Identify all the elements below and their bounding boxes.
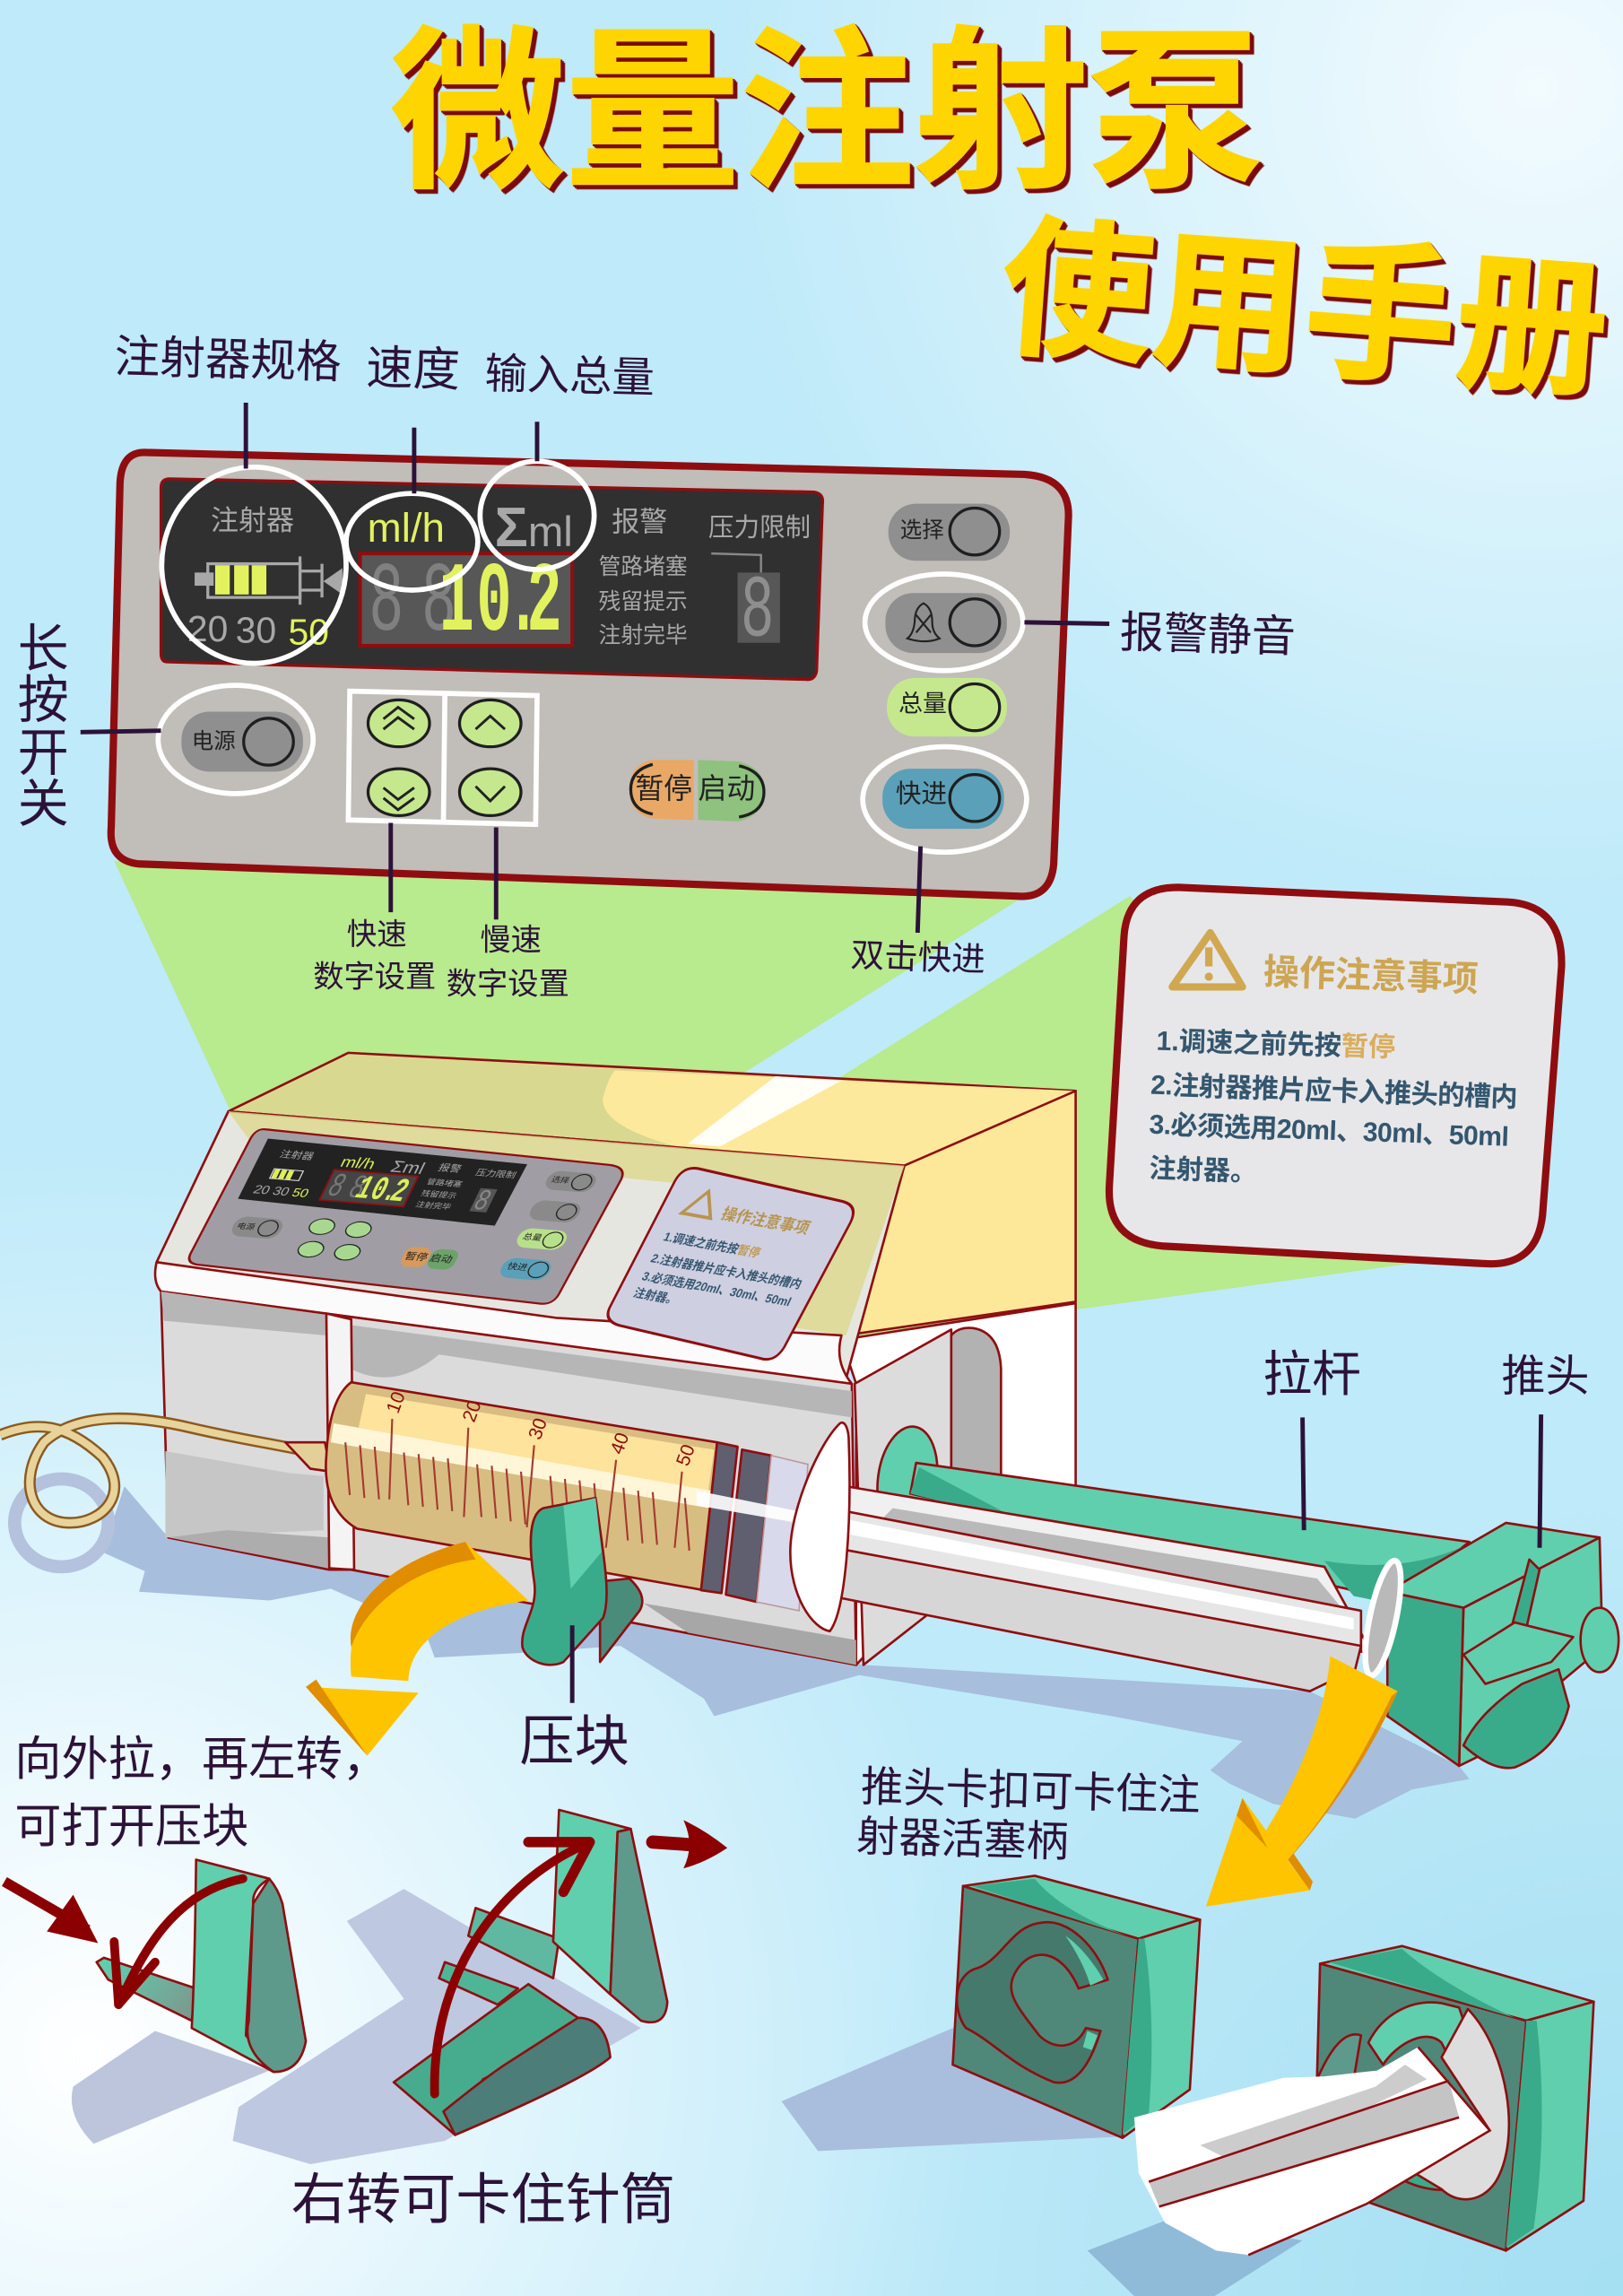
green projection beam to panel xyxy=(114,861,1024,1113)
arrow right rim xyxy=(1237,1692,1398,1891)
push arrow xyxy=(4,1882,88,1930)
clear section glare xyxy=(697,1491,797,1523)
size 30: 30 xyxy=(236,610,276,651)
barrel numbers: 10 xyxy=(383,1389,410,1416)
sticker text: 3.必须选用20ml、30ml、50ml xyxy=(639,1268,794,1309)
lower body shade xyxy=(644,1604,856,1665)
pump side inset xyxy=(855,1329,951,1665)
notice item 3: 3.必须选用20ml、30ml、50ml xyxy=(1149,1109,1509,1152)
digital readout: 10.2 xyxy=(439,549,562,660)
label: long press power xyxy=(18,621,69,833)
label: speed: 速度 xyxy=(366,343,461,396)
notice item 3 continued: 注射器。 xyxy=(1149,1153,1258,1187)
label: press block: 压块 xyxy=(519,1710,629,1771)
pump sloped front face xyxy=(157,1111,905,1379)
lying plate xyxy=(394,1984,578,2135)
sticker plate xyxy=(599,1164,862,1363)
mini buttons: 总量 xyxy=(521,1231,544,1243)
warning triangle xyxy=(1172,933,1243,987)
syringe icon xyxy=(195,556,343,604)
pause / start button xyxy=(629,760,766,822)
plunger end ring xyxy=(1358,1558,1408,1678)
shadow block B xyxy=(233,1889,641,2164)
pressure digit: 8 xyxy=(741,563,774,662)
plunger flange xyxy=(1405,2009,1509,2199)
head clip xyxy=(1463,1622,1574,1684)
barrel highlight xyxy=(331,1423,711,1509)
shadow under lip xyxy=(161,1292,852,1417)
mini labels: ml/h xyxy=(338,1153,378,1172)
head back face xyxy=(1459,1537,1602,1766)
pump top highlight xyxy=(603,1070,1076,1166)
digital readout: 88 xyxy=(369,549,456,660)
pressure label: 压力限制 xyxy=(708,514,811,543)
mini buttons: 选择 xyxy=(550,1175,572,1185)
clip hook rim top xyxy=(1065,1935,1104,1986)
power button: 电源 xyxy=(192,728,236,753)
alarm list: 残留提示 xyxy=(599,589,688,614)
label: slow: 慢速 xyxy=(480,924,542,958)
block right inner shade xyxy=(1506,2021,1542,2248)
lower bar xyxy=(439,1962,518,2005)
block front xyxy=(522,1498,607,1665)
mini labels: Σml xyxy=(387,1158,428,1178)
syringe sizes: 20 xyxy=(187,608,228,649)
label: clip instruction line 2: 射器活塞柄 xyxy=(855,1813,1069,1866)
plunger shaft xyxy=(1134,2047,1489,2255)
pause / start button: 暂停 xyxy=(635,772,692,804)
yellow arrow right xyxy=(1206,1657,1398,1907)
syringe tip xyxy=(285,1442,331,1472)
label: alarm mute: 报警静音 xyxy=(1119,609,1296,662)
rotate arrow head xyxy=(528,1842,590,1892)
head clip lower xyxy=(1463,1669,1569,1768)
plunger grey band xyxy=(878,1509,1354,1622)
infusion tube xyxy=(0,1419,300,1523)
alarm list: 注射完毕 xyxy=(599,623,688,648)
label: long press power: 按 xyxy=(18,672,69,729)
title: subtitle: 使用手册 xyxy=(995,204,1614,416)
display screen xyxy=(161,479,822,680)
arrow head rim xyxy=(306,1680,368,1756)
label: open instruction line 2: 可打开压块 xyxy=(14,1801,248,1853)
speed button frame xyxy=(348,691,537,824)
mini buttons: 暂停 xyxy=(403,1250,430,1263)
mini syringe icon xyxy=(270,1169,303,1180)
block highlight xyxy=(563,1498,602,1588)
sticker heading: 操作注意事项 xyxy=(718,1204,813,1238)
pressure digit xyxy=(711,553,780,662)
plate side xyxy=(247,1879,306,2072)
pump right yellow wall xyxy=(845,1091,1076,1335)
panel plate xyxy=(111,452,1069,896)
mini pressure digit: 8 xyxy=(467,1186,497,1219)
mini labels: 残留提示 xyxy=(420,1188,458,1200)
reflective white streak xyxy=(688,1076,841,1146)
barrel body xyxy=(325,1382,717,1590)
rubber gasket xyxy=(701,1442,771,1602)
sticker text xyxy=(631,1229,815,1326)
yellow arrow left xyxy=(306,1542,528,1756)
select button: 选择 xyxy=(900,517,944,543)
upper bar xyxy=(468,1908,559,1979)
barrel graduations xyxy=(345,1419,690,1551)
plunger central rail xyxy=(818,1507,1361,1652)
head side face xyxy=(1387,1592,1463,1766)
label: open instruction: 向外拉，再左转， xyxy=(14,1734,389,1786)
mini buttons: 快进 xyxy=(505,1262,530,1273)
arrow shaft rim xyxy=(351,1542,475,1648)
block top inner shade xyxy=(1329,1949,1515,2018)
mini buttons: 启动 xyxy=(428,1252,455,1265)
block top xyxy=(963,1875,1200,1939)
plunger lower slab xyxy=(818,1544,1361,1692)
label: long press power: 开 xyxy=(18,725,69,782)
plunger lower grey stripe xyxy=(1149,2081,1459,2206)
shadow of tube loop xyxy=(14,1479,108,1567)
pause / start button: 启动 xyxy=(699,772,755,804)
select button xyxy=(889,504,1010,561)
clip lower hook xyxy=(1398,2150,1471,2190)
notice heading: 操作注意事项 xyxy=(1263,952,1479,1000)
pump right tower xyxy=(841,1303,1076,1665)
left face lower shade xyxy=(169,1530,329,1569)
green rod behind plunger xyxy=(871,1422,1470,1604)
label: clip instruction: 推头卡扣可卡住注 xyxy=(860,1763,1201,1820)
arrow right head xyxy=(1206,1798,1310,1907)
infusion pump body xyxy=(155,1053,1076,1665)
clip left lobe xyxy=(1317,2034,1361,2094)
block top xyxy=(1320,1946,1593,2021)
highlight ring alarm xyxy=(865,574,1023,671)
highlight ring total xyxy=(480,461,595,570)
detail: press block opening xyxy=(4,1859,306,2072)
pump arch strip xyxy=(951,1328,1001,1567)
total button xyxy=(887,678,1007,736)
white lip band xyxy=(155,1262,852,1384)
mini digits xyxy=(317,1169,419,1212)
label: syringe size: 注射器规格 xyxy=(114,331,342,387)
sticker text: 1.调速之前先按暂停 xyxy=(661,1229,763,1260)
rotate arrow xyxy=(435,1842,590,2094)
alarm label: 报警 xyxy=(612,507,667,538)
plunger red lines xyxy=(1149,2047,1489,2255)
label: long press power: 关 xyxy=(18,776,69,833)
label: double click: 双击快进 xyxy=(850,936,985,978)
floor shadow of pump xyxy=(102,1486,1470,1819)
highlight ring syringe xyxy=(161,467,346,664)
block front xyxy=(1315,1963,1526,2250)
highlight ring fast-forward xyxy=(863,747,1027,852)
total unit: Σml xyxy=(495,497,573,559)
highlight ring speed xyxy=(346,493,478,590)
pull arrow xyxy=(653,1842,695,1845)
mini digits: 88 xyxy=(320,1169,373,1208)
head top face xyxy=(1387,1523,1600,1608)
mini control panel on pump xyxy=(180,1128,631,1305)
pump lower front xyxy=(161,1292,856,1665)
arrow right shaft xyxy=(1259,1657,1398,1859)
notice plate xyxy=(1109,887,1561,1264)
block right inner shade xyxy=(1123,1939,1151,2135)
barrel numbers xyxy=(383,1389,699,1469)
shadow block C xyxy=(782,2028,1128,2151)
mini panel plate xyxy=(180,1128,631,1305)
size 50: 50 xyxy=(289,611,329,652)
mini buttons: 电源 xyxy=(236,1222,257,1231)
leader lines xyxy=(81,403,1541,1703)
label: total: 输入总量 xyxy=(484,351,655,403)
syringe plunger xyxy=(818,1483,1373,1692)
plate dark xyxy=(611,1829,667,2022)
head knob xyxy=(1581,1608,1619,1672)
plate front xyxy=(192,1859,273,2072)
block top inner shade xyxy=(972,1879,1127,1935)
rotate arrow head xyxy=(114,1942,155,2005)
detail: pusher clip with plunger xyxy=(1134,1946,1593,2255)
mini labels: 注射器 xyxy=(278,1149,317,1162)
barrel numbers: 50 xyxy=(673,1442,699,1469)
clip groove top xyxy=(1368,2003,1480,2087)
shadows below detail blocks xyxy=(72,1889,1303,2296)
sticker text: 注射器。 xyxy=(631,1285,681,1307)
sticker warning triangle xyxy=(681,1188,722,1218)
yellow wash on front face xyxy=(229,1111,905,1335)
notice panel xyxy=(1109,887,1561,1264)
mini labels: 压力限制 xyxy=(473,1168,518,1180)
label: push head: 推头 xyxy=(1502,1352,1589,1401)
speed buttons xyxy=(368,700,521,815)
label: long press power: 长 xyxy=(18,621,69,678)
syringe flange xyxy=(790,1422,849,1631)
block front xyxy=(952,1886,1139,2138)
left white column xyxy=(326,1313,354,1570)
syringe barrel xyxy=(325,1382,849,1631)
fast-forward button: 快进 xyxy=(896,780,947,809)
plunger highlight xyxy=(827,1516,1354,1630)
mini notice sticker on pump xyxy=(599,1164,862,1363)
barrel numbers: 20 xyxy=(459,1398,486,1425)
arrow head xyxy=(306,1687,419,1756)
lying dark face xyxy=(444,2018,611,2135)
barrel bright band xyxy=(359,1394,714,1491)
digital readout xyxy=(360,549,572,660)
label: fast digit setting: 数字设置 xyxy=(313,960,436,994)
mini labels: 注射完毕 xyxy=(414,1200,453,1211)
total button: 总量 xyxy=(898,690,947,717)
plunger upper rail xyxy=(820,1483,1373,1655)
left face upper shade xyxy=(165,1451,324,1537)
highlight ring power xyxy=(158,685,313,794)
rod bar xyxy=(910,1463,1470,1604)
mini labels: 20 30 50 xyxy=(251,1183,311,1200)
shadow block D xyxy=(1088,2218,1303,2296)
green projection beam to notice xyxy=(725,896,1463,1340)
label: right turn: 右转可卡住针筒 xyxy=(291,2169,675,2230)
block back xyxy=(600,1578,642,1662)
clip groove xyxy=(957,1922,1108,2083)
barrel numbers: 40 xyxy=(607,1431,633,1457)
label: fast: 快速 xyxy=(347,918,407,952)
alarm list xyxy=(599,554,688,648)
label: pull rod: 拉杆 xyxy=(1263,1346,1361,1402)
clip hook rim bottom xyxy=(1083,2031,1098,2050)
block right xyxy=(1123,1919,1200,2138)
pusher head xyxy=(1358,1523,1619,1768)
mini labels: 报警 xyxy=(437,1162,464,1175)
mini labels: 管路堵塞 xyxy=(425,1177,464,1188)
label: slow digit setting: 数字设置 xyxy=(447,968,569,1002)
arrow shaft xyxy=(351,1542,528,1681)
screen label syringe: 注射器 xyxy=(211,505,294,536)
rotate arrow xyxy=(118,1879,243,2005)
mini screen xyxy=(235,1138,529,1226)
rod dark underside xyxy=(910,1467,1024,1523)
rod dark end xyxy=(1324,1544,1466,1604)
head center groove xyxy=(1507,1560,1540,1648)
detail: press block closing xyxy=(394,1810,727,2135)
fast-forward button xyxy=(882,769,1004,829)
speed unit: ml/h xyxy=(368,505,445,551)
sticker text: 2.注射器推片应卡入推头的槽内 xyxy=(648,1250,804,1292)
detail: pusher clip empty xyxy=(952,1875,1200,2138)
power button xyxy=(181,711,303,771)
bar xyxy=(97,1958,196,2021)
control panel xyxy=(111,452,1069,896)
barrel numbers: 30 xyxy=(525,1415,551,1442)
notice item 2: 2.注射器推片应卡入推头的槽内 xyxy=(1150,1070,1518,1113)
pull arrow head xyxy=(683,1820,727,1868)
alarm list: 管路堵塞 xyxy=(599,554,688,579)
press block on barrel xyxy=(522,1498,642,1665)
pump top face xyxy=(229,1053,1076,1166)
mini buttons xyxy=(219,1147,600,1281)
mini labels xyxy=(251,1147,519,1216)
clear section xyxy=(757,1456,808,1611)
mini digits: 10.2 xyxy=(348,1171,414,1212)
notice item 1: 1.调速之前先按暂停 xyxy=(1156,1026,1396,1063)
plunger upper grey stripe xyxy=(1200,2065,1427,2167)
title: main: 微量注射泵 xyxy=(391,16,1263,211)
push arrow head xyxy=(47,1895,98,1944)
block right xyxy=(1506,2002,1593,2250)
rod disk xyxy=(871,1422,943,1535)
plate light xyxy=(553,1810,630,1995)
alarm mute button xyxy=(885,593,1007,653)
shadow block A xyxy=(72,2031,269,2144)
